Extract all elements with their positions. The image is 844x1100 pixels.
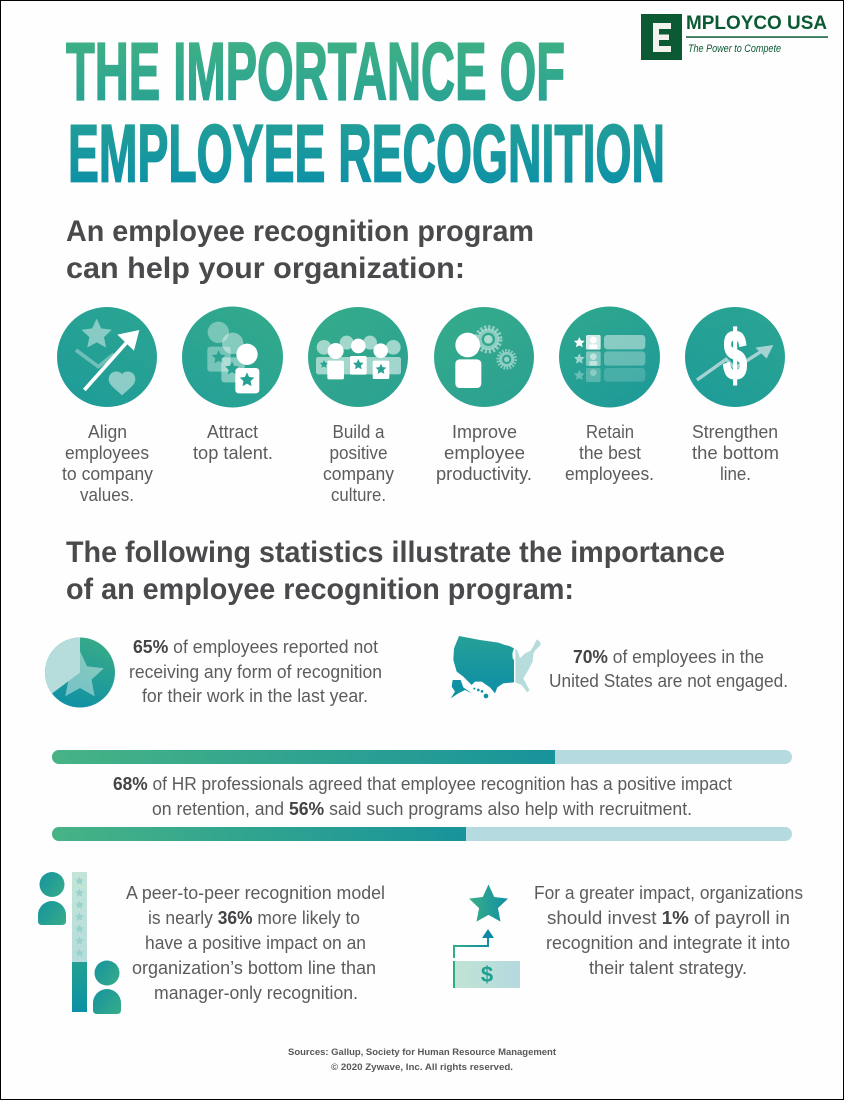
label: build culture [323, 422, 394, 505]
label: improve productivity [436, 422, 532, 484]
label: attract talent [193, 422, 273, 463]
icon: bottom line [685, 307, 785, 407]
heading: statistics: The following statistics illustrate the importance [66, 536, 725, 569]
heading: program benefits [66, 215, 534, 285]
label: retain employees: the best [579, 443, 641, 463]
text: 65% stat: 65% of employees reported not [133, 637, 378, 657]
text: peer-to-peer stat: A peer-to-peer recognition model [126, 883, 385, 903]
heading: program benefits: An employee recognition program [66, 215, 534, 248]
text: 65% stat [129, 637, 382, 706]
logo: Employco USA [641, 13, 828, 60]
text: 70% stat: 70% of employees in the [573, 647, 764, 667]
progress bar: 68% [52, 750, 792, 764]
progress bar: 56% [52, 827, 792, 841]
label: align employees: Align [88, 422, 127, 442]
label: retain employees: employees. [565, 464, 654, 484]
text: peer-to-peer stat: manager-only recognition. [154, 983, 358, 1003]
chart: 65% pie with star [45, 638, 115, 708]
heading: statistics [66, 536, 725, 606]
label: align employees: to company [62, 464, 153, 484]
icon: bottom line: $ [723, 318, 747, 394]
label: align employees [62, 422, 153, 505]
label: improve productivity: employee [444, 443, 525, 463]
text: HR professionals stat: on retention, and 56% said such programs also help with recruitment. [152, 799, 692, 819]
text: 70% stat [549, 647, 788, 691]
text: HR professionals stat: 68% of HR professionals agreed that employee recognition has a positive impact [113, 774, 732, 794]
label: build culture: culture. [331, 485, 386, 505]
label: retain employees [565, 422, 654, 484]
text: invest 1% of payroll [534, 883, 803, 978]
label: strengthen bottom line: line. [720, 464, 751, 484]
icon: align values [57, 307, 157, 407]
icon: productivity [434, 307, 534, 407]
label: strengthen bottom line: the bottom [692, 443, 779, 463]
label: build culture: company [323, 464, 394, 484]
label: align employees: values. [80, 485, 134, 505]
title [66, 26, 665, 200]
text: 65% stat: receiving any form of recognition [129, 662, 382, 682]
text: invest 1% of payroll: should invest 1% of payroll in [547, 908, 790, 928]
icon: positive culture [308, 307, 408, 407]
label: strengthen bottom line: Strengthen [692, 422, 778, 442]
heading: statistics: of an employee recognition program: [66, 573, 574, 606]
text: HR professionals stat [113, 774, 732, 819]
footer: sources and copyright [288, 1047, 557, 1073]
label: attract talent: top talent. [193, 443, 273, 463]
label: align employees: employees [65, 443, 149, 463]
text: 65% stat: for their work in the last year. [142, 686, 368, 706]
label: build culture: Build a [332, 422, 385, 442]
label: attract talent: Attract [207, 422, 258, 442]
text: invest 1% of payroll: recognition and integrate it into [546, 933, 790, 953]
text: peer-to-peer stat [126, 883, 385, 1003]
chart: 70% US map [451, 636, 541, 698]
footer: sources and copyright: Sources: Gallup, Society for Human Resource Management [288, 1047, 557, 1058]
label: improve productivity: productivity. [436, 464, 532, 484]
icon: peer-to-peer column with people [38, 872, 121, 1014]
text: peer-to-peer stat: organization’s bottom line than [132, 958, 376, 978]
label: strengthen bottom line [692, 422, 779, 484]
text: 70% stat: United States are not engaged. [549, 671, 788, 691]
text: peer-to-peer stat: have a positive impact on an [145, 933, 366, 953]
label: build culture: positive [330, 443, 388, 463]
label: retain employees: Retain [586, 422, 634, 442]
logo: Employco USA: The Power to Compete [688, 43, 781, 55]
footer: sources and copyright: © 2020 Zywave, Inc. All rights reserved. [331, 1062, 513, 1073]
text: peer-to-peer stat: is nearly 36% more likely to [148, 908, 360, 928]
heading: program benefits: can help your organization: [66, 252, 465, 285]
text: invest 1% of payroll: For a greater impact, organizations [534, 883, 803, 903]
text: invest 1% of payroll: their talent strategy. [589, 958, 747, 978]
icon: star, arrow and dollar bar [453, 884, 520, 988]
logo: Employco USA: MPLOYCO USA [686, 13, 827, 34]
label: improve productivity: Improve [452, 422, 517, 442]
icon: attract talent [182, 306, 283, 408]
icon: retain employees [559, 306, 660, 408]
icon: star, arrow and dollar bar: $ [481, 962, 493, 987]
